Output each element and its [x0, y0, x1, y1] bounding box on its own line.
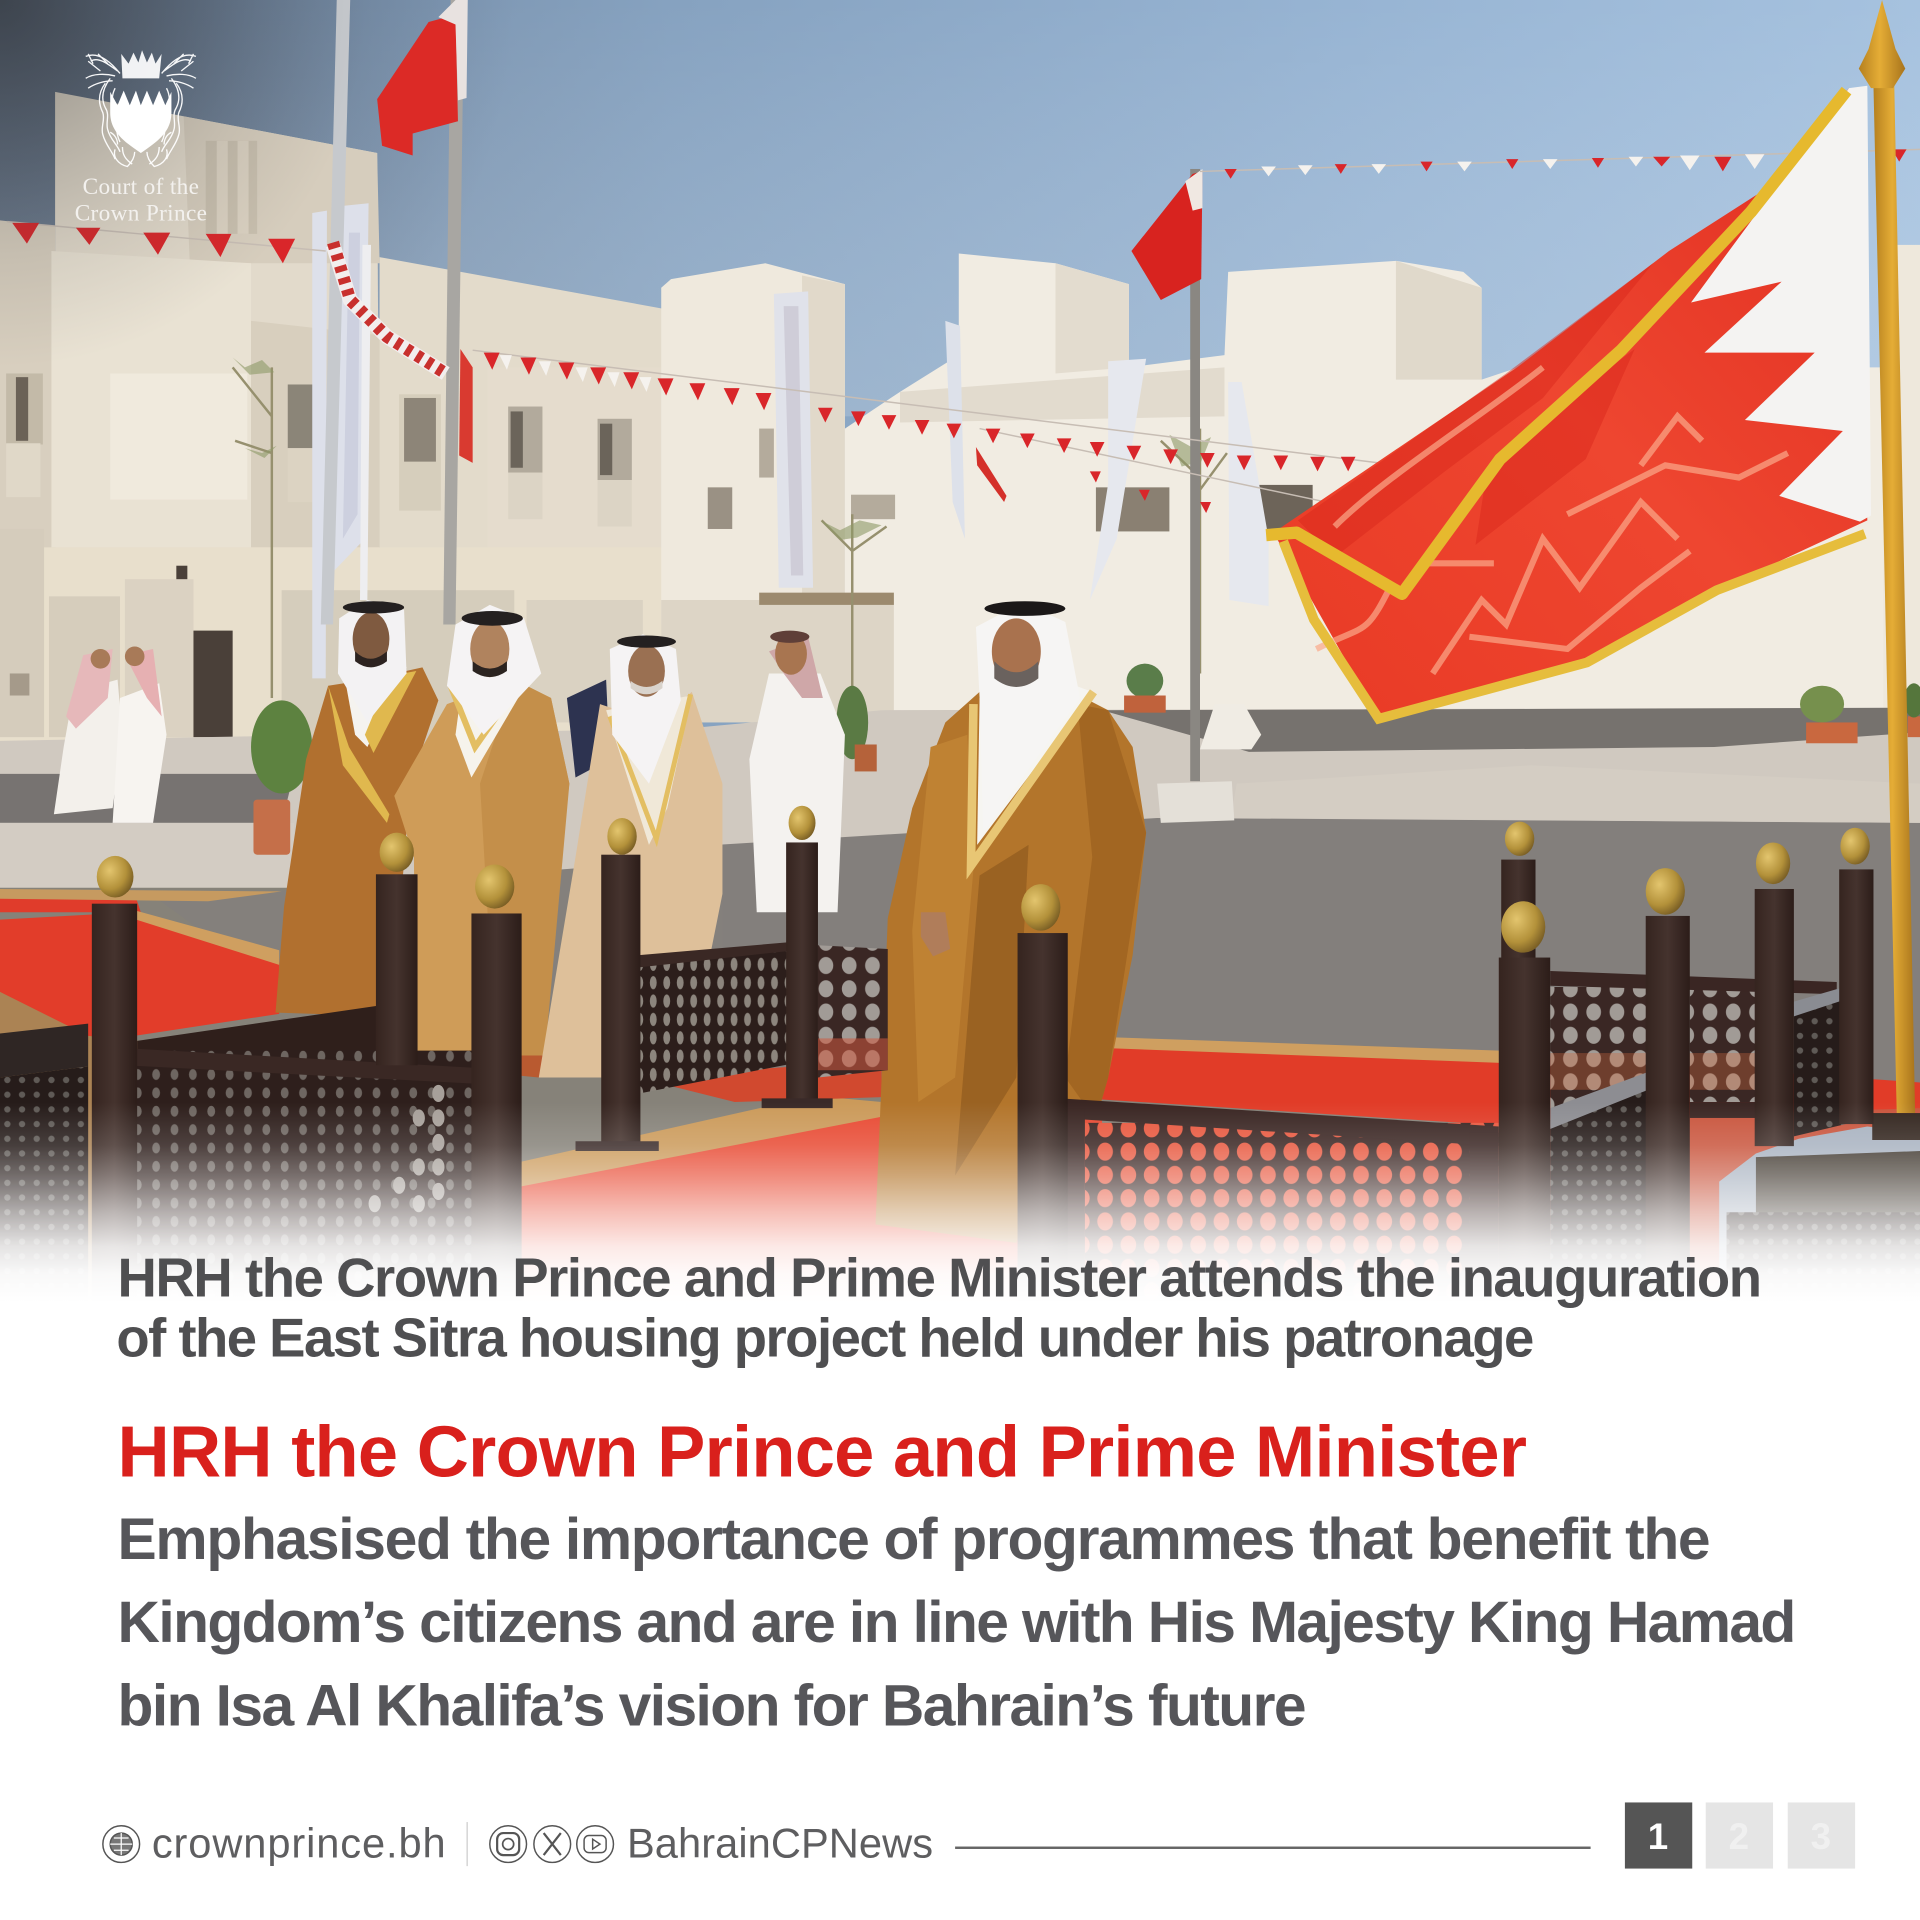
flag poles and small flags	[321, 0, 1261, 823]
icon: YouTube	[577, 1826, 613, 1862]
Crown Prince in brown bisht	[876, 601, 1146, 1243]
sky	[0, 0, 1920, 882]
red carpets	[0, 889, 1920, 1304]
body text	[118, 1507, 1796, 1738]
emblem right wreath	[147, 54, 196, 167]
flag: upper left	[377, 0, 468, 156]
body text: bin Isa Al Khalifa’s vision for Bahrain’s future	[118, 1673, 1307, 1738]
street trees and planters	[233, 358, 1920, 855]
white fade into text area	[0, 1078, 1920, 1304]
icon: instagram	[490, 1826, 527, 1862]
red title: HRH the Crown Prince and Prime Minister	[118, 1413, 1527, 1493]
emblem left wreath	[86, 54, 135, 167]
social handle: BahrainCPNews	[627, 1820, 933, 1867]
page 1 marker	[1625, 1802, 1692, 1869]
logo: Court of the Crown Prince	[75, 50, 207, 226]
page 2 marker	[1706, 1802, 1773, 1869]
footer	[103, 1802, 1855, 1869]
lattice panels	[0, 942, 1920, 1304]
court name: Crown Prince	[75, 200, 207, 226]
gold ceremonial pole	[1859, 0, 1915, 1113]
headline: of the East Sitra housing project held under his patronage	[116, 1308, 1534, 1369]
icon: X	[534, 1826, 571, 1862]
dignitary 2 in tan bisht	[394, 605, 569, 1056]
icon: globe	[103, 1826, 140, 1862]
flag: centre	[1131, 169, 1202, 300]
event photograph	[0, 0, 1920, 1304]
white text panel	[0, 1303, 1920, 1920]
dignitary 3 in beige bisht	[539, 634, 722, 1078]
website: crownprince.bh	[152, 1820, 446, 1867]
vertical white banners	[312, 203, 1269, 678]
large Bahrain flag	[1266, 86, 1871, 719]
emblem shield	[110, 91, 171, 153]
fence posts	[92, 842, 1873, 1304]
ornate wooden fence	[0, 806, 1920, 1304]
page 3 marker: 3	[1811, 1816, 1831, 1857]
guest in white thobe	[749, 631, 845, 912]
central and right white buildings	[661, 245, 1920, 759]
bunting strings	[7, 149, 1920, 514]
body text: Emphasised the importance of programmes that benefit the	[118, 1507, 1711, 1572]
flag white hoist with serrations	[1691, 86, 1871, 522]
body text: Kingdom’s citizens and are in line with His Majesty King Hamad	[118, 1590, 1796, 1655]
page 3 marker	[1788, 1802, 1855, 1869]
background guests	[54, 647, 167, 823]
streets and pavement	[0, 708, 1920, 1304]
dignitary 1 in brown bisht	[276, 600, 438, 1016]
gold finials	[97, 806, 1870, 953]
court name	[75, 174, 207, 226]
left villa buildings	[0, 92, 667, 747]
court name: Court of the	[83, 174, 199, 200]
headline	[116, 1248, 1762, 1369]
emblem crown	[121, 50, 162, 78]
page 1 marker: 1	[1648, 1816, 1668, 1857]
headline: HRH the Crown Prince and Prime Minister attends the inauguration	[118, 1248, 1762, 1309]
page 2 marker: 2	[1729, 1816, 1749, 1857]
top-left building vignette	[0, 0, 416, 392]
